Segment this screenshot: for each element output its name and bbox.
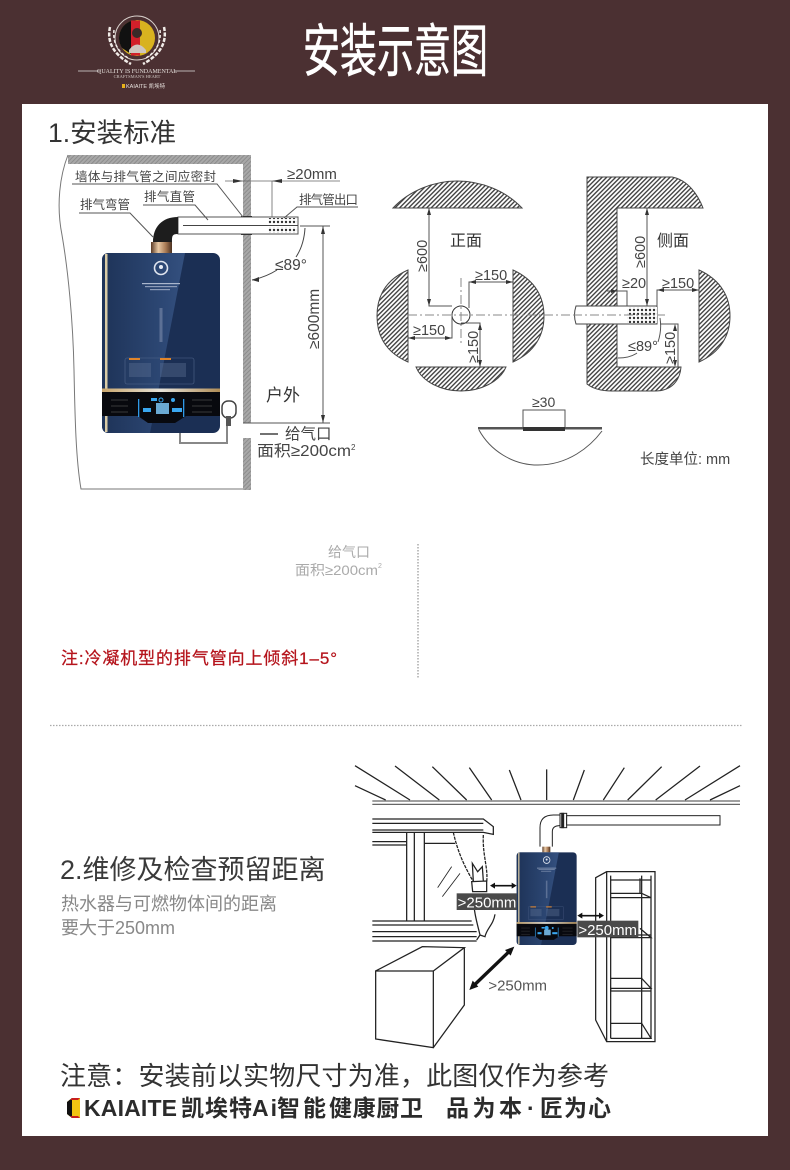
dotted horizontal divider [50,724,742,726]
labels and leaders [72,169,358,237]
dimension: 89 degree angle: ≤89° [275,257,307,274]
diagram: installation side section [59,155,358,490]
label: air inlet [257,425,356,460]
dimension values: ≥150 [663,332,679,364]
header logo emblem: QUALITY IS FUNDAMENTAL [97,69,177,75]
header logo emblem [78,16,195,90]
box [376,947,464,1048]
dimension values: ≥150 [475,268,507,284]
brand slogan: · [527,1095,535,1121]
label: air inlet: 给气口 [285,425,332,443]
ceiling [355,766,740,804]
dotted vertical divider [417,544,419,678]
section 2 description: 热水器与可燃物体间的距离 [61,894,277,914]
diagram: side clearance [573,177,730,391]
brand slogan: 智能 [277,1095,326,1121]
clearance label front: >250mm [488,977,547,994]
label: side view: 侧面 [657,232,689,250]
clearance label right: >250mm [578,922,637,939]
faded air inlet label: 给气口 [328,544,370,560]
label: air inlet: 面积≥200cm [257,442,351,460]
dimension: 89 degree angle [252,228,307,282]
brand slogan [84,1095,611,1121]
dimension: 600mm [243,226,330,423]
diagram: front clearance [377,181,573,391]
labels and leaders: 排气直管 [144,189,195,204]
dimension: 600mm: ≥600mm [306,289,323,349]
dimension: 20mm: ≥20mm [287,166,337,183]
notice text: 注意：安装前以实物尺寸为准，此图仅作为参考 [60,1061,609,1091]
curtain [453,832,495,940]
heading: section 1: 1.安装标准 [48,118,176,148]
brass connector [151,242,172,253]
header logo emblem: KAIAITE 凯埃特 [126,82,166,90]
brass connector [542,847,550,852]
labels and leaders: 墙体与排气管之间应密封 [75,169,216,184]
power cable and plug [180,401,236,443]
heading: section 2: 2.维修及检查预留距离 [60,855,326,885]
brand footer [67,1095,611,1121]
diagram: 30mm seal detail [478,394,602,465]
dimension lines [607,208,699,367]
label: air inlet: 2 [351,443,356,452]
dimension: 20mm [225,166,340,217]
brand slogan: KAIAITE [84,1095,177,1121]
water heater [102,253,220,433]
brand slogan: 健康厨卫 [329,1095,423,1121]
dimension values [413,240,507,363]
section 2 description [61,894,277,938]
dimension lines [408,208,513,367]
dimension values: ≥150 [466,331,482,363]
water heater [517,852,577,945]
wall [59,155,252,490]
brand slogan: 匠为心 [540,1095,611,1121]
dimension values [622,236,694,364]
diagram: 30mm seal detail: ≥30 [532,394,555,410]
length unit note: 长度单位: mm [640,451,730,468]
dimension values: ≥20 [622,276,646,292]
obstacles [377,181,544,391]
faded air inlet label: 2 [378,563,382,570]
walls and obstacle [587,177,730,391]
section 2 description: 要大于250mm [61,918,175,938]
flue pipe [540,813,720,847]
labels and leaders: 排气弯管 [80,197,130,212]
flue circle and centre lines [408,278,573,345]
labels and leaders: 排气管出口 [299,192,358,207]
shelf unit [596,872,655,1042]
dimension values: ≥600 [415,240,431,272]
red condensing model note: 注:冷凝机型的排气管向上倾斜1–5° [61,649,337,668]
exhaust elbow [153,217,178,242]
brand slogan: 凯埃特 [181,1095,252,1121]
pipe and mesh outlet [573,306,665,324]
header logo emblem: CRAFTSMAN'S HEART [114,74,161,79]
label: outdoor: 户外 [266,386,300,405]
arrows [469,883,604,990]
illustration: maintenance clearances [355,766,740,1048]
faded air inlet label: 面积≥200cm [295,562,378,578]
label: front view: 正面 [450,233,482,250]
brand mark [67,1098,80,1118]
dimension values: ≤89° [628,339,658,355]
dimension values: ≥150 [662,276,694,292]
faded air inlet label [295,544,382,578]
clearance label left: >250mm [458,895,516,912]
dimension values: ≥150 [413,323,445,339]
window [372,819,493,941]
exhaust straight pipe and outlet [178,217,298,234]
brand slogan: 品为本 [446,1095,522,1121]
page title: 安装示意图 [303,21,488,84]
dimension values: ≥600 [633,236,649,268]
brand slogan: Ai [252,1095,277,1121]
